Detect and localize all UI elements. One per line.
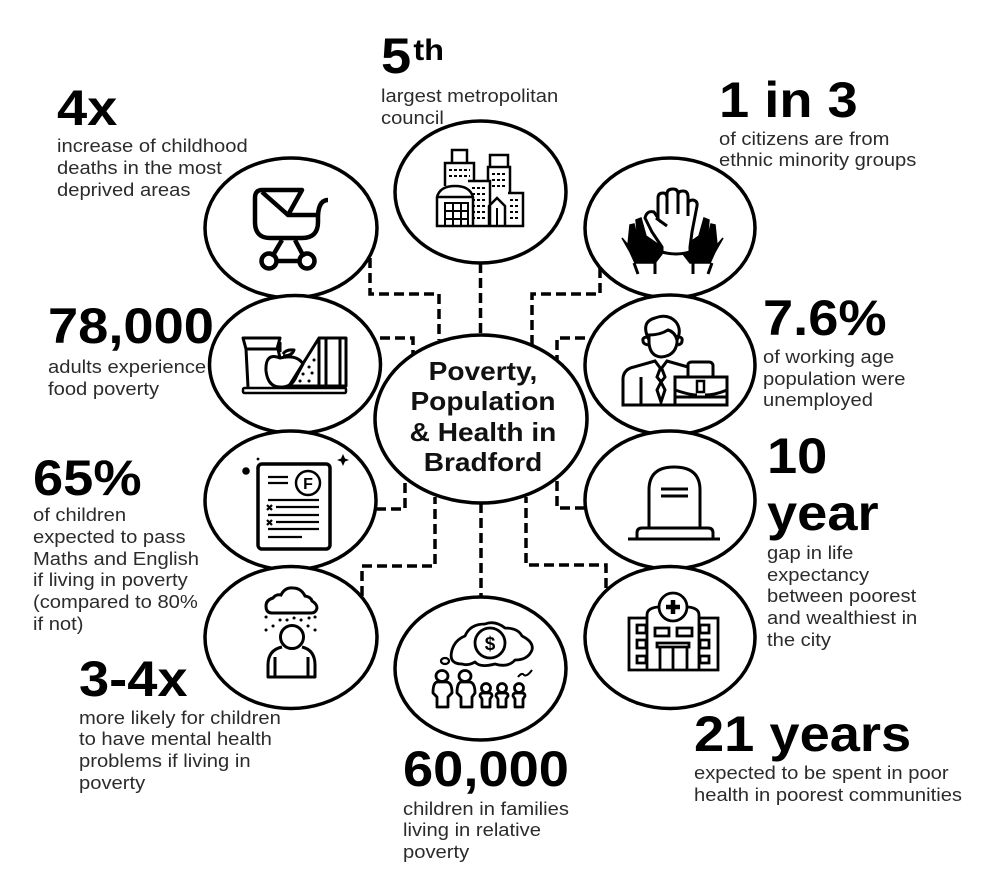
stat: 10 year: year [767,485,879,541]
stat: 5th: largest metropolitan [381,85,558,106]
stat: 60,000: poverty [403,841,469,862]
icon: hospital [629,593,718,670]
stat: 1 in 3 [719,72,916,170]
circle: worker [585,295,755,435]
stat: 21 years: expected to be spent in poor [694,762,949,783]
icon: stroller [255,190,328,268]
center title [410,356,556,477]
stat: 65%: if not) [33,613,83,634]
stat: 10 year: 10 [767,428,827,484]
stat: 78,000 [48,298,214,399]
stat: 65%: expected to pass [33,526,186,547]
stat: 65%: Maths and English [33,548,199,569]
stat: 4x [57,80,248,200]
stat: 1 in 3: of citizens are from [719,128,889,149]
stat: 21 years [694,706,962,805]
stat: 60,000 [403,741,569,862]
stat: 3-4x: problems if living in [79,750,251,771]
stat: 60,000: children in families [403,798,569,819]
circle: hospital [585,566,755,708]
stat: 3-4x: 3-4x [79,651,188,707]
icon: food [243,338,346,393]
stat: 78,000: adults experience [48,356,206,377]
stat: 7.6% [763,290,905,410]
icon: city [437,150,523,226]
circle: stroller [205,158,377,298]
circle: city [395,121,566,263]
stat: 3-4x: poverty [79,772,145,793]
icon: hands [622,189,723,274]
stat: 10 year: and wealthiest in [767,607,917,628]
circle: food [210,296,380,434]
stat: 4x: increase of childhood [57,135,248,156]
circle: family [395,597,566,740]
stat: 10 year [767,428,917,650]
stat: 5th: 5th [381,28,444,84]
center title: & Health in [410,417,556,447]
stat: 7.6%: 7.6% [763,290,887,346]
stat: 4x: 4x [57,80,117,136]
stat: 5th [381,28,558,128]
icon: worker [623,316,727,405]
stat: 1 in 3: 1 in 3 [719,72,858,128]
stat: 21 years: 21 years [694,706,911,762]
circle: grave [585,431,755,569]
stat: 10 year: expectancy [767,564,869,585]
stat: 3-4x: to have mental health [79,728,272,749]
stat: 65%: 65% [33,450,142,506]
stat: 4x: deaths in the most [57,157,222,178]
stat: 7.6%: unemployed [763,389,873,410]
stat: 65%: (compared to 80% [33,591,198,612]
circle: exam [205,431,376,570]
central circle [375,335,587,503]
stat: 21 years: health in poorest communities [694,784,962,805]
stat: 65%: if living in poverty [33,569,188,590]
stat: 3-4x [79,651,281,793]
center title: Poverty, [429,356,537,386]
stat: 60,000: living in relative [403,819,541,840]
stat: 10 year: the city [767,629,831,650]
stat: 65%: of children [33,504,126,525]
icon: family and dollar cloud: $ [485,634,496,655]
stat: 5th: council [381,107,444,128]
icon: exam paper: F [303,476,313,493]
icon: gravestone [628,467,720,539]
circle: hands [585,158,755,298]
center title: Bradford [424,447,542,477]
stat: 78,000: food poverty [48,378,159,399]
stat: 1 in 3: ethnic minority groups [719,149,916,170]
stat: 78,000: 78,000 [48,298,214,354]
dashed connectors [362,258,606,597]
icon: exam paper [242,454,349,549]
stat: 3-4x: more likely for children [79,707,281,728]
stat: 4x: deprived areas [57,179,190,200]
circle: rain [205,566,377,708]
stat: 7.6%: population were [763,368,905,389]
stat: 10 year: between poorest [767,585,916,606]
stat: 65% [33,450,199,634]
stat: 7.6%: of working age [763,346,894,367]
stat: 60,000: 60,000 [403,741,569,797]
icon: rain person [266,588,317,677]
stat: 10 year: gap in life [767,542,853,563]
icon: family and dollar cloud [433,623,532,707]
center title: Population [410,386,556,416]
